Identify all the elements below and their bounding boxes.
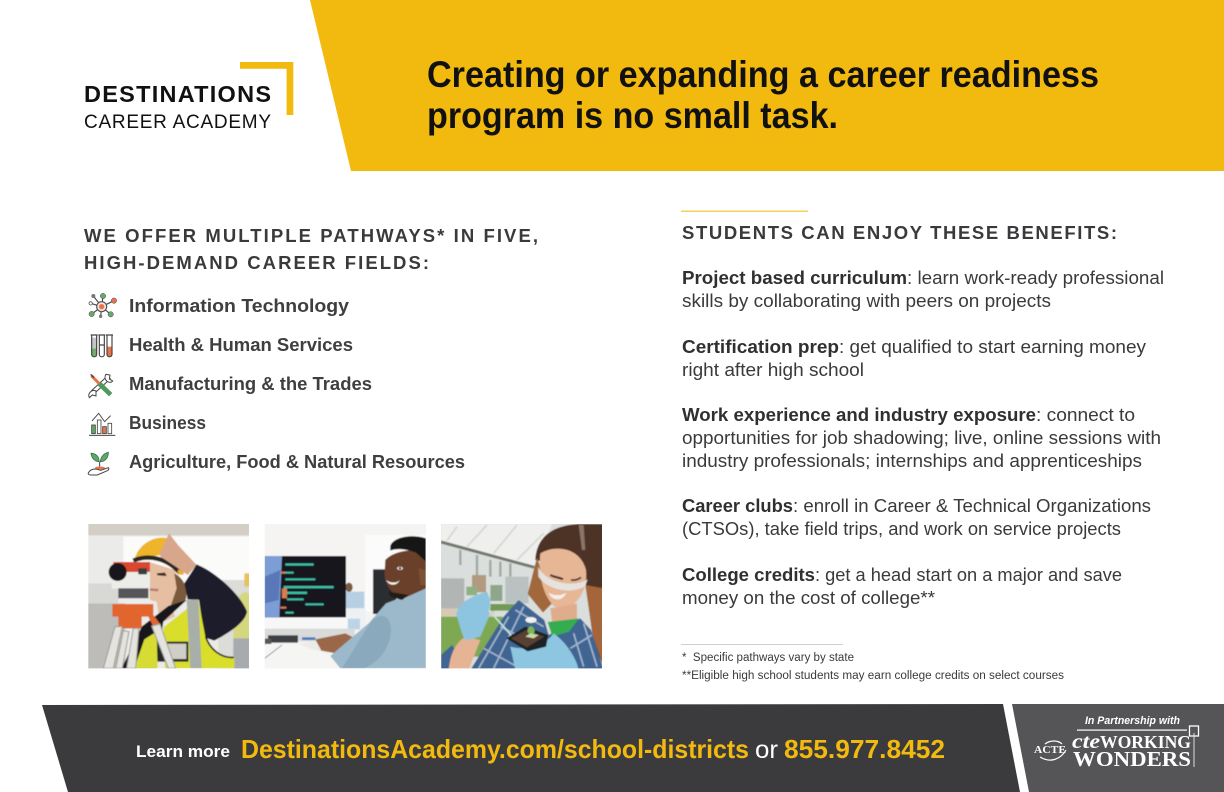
benefit: work experience: opportunities for job shadowing; live, online sessions with <box>682 427 1161 448</box>
footer call-to-action bar: DestinationsAcademy.com/school-districts <box>241 734 749 764</box>
partner panel: WONDERS <box>1073 747 1191 771</box>
logo: ACTE <box>1034 741 1066 760</box>
footer call-to-action bar <box>42 704 1020 792</box>
benefit: college credits: College credits <box>682 564 815 585</box>
benefit: career clubs: Career clubs <box>682 495 793 516</box>
footnotes <box>681 644 1064 682</box>
footnotes: **Eligible high school students may earn college credits on select courses <box>682 670 1064 682</box>
icon: small emblem <box>1190 726 1198 736</box>
benefit: college credits: money on the cost of college** <box>682 587 935 608</box>
headline: Creating or expanding a career readiness <box>427 54 1099 95</box>
icon: seedling in hand <box>88 452 109 475</box>
photo: programmer at computer <box>262 520 429 670</box>
label: Business: Business <box>129 412 206 433</box>
benefit: career clubs: : enroll in Career & Technical Organizations <box>793 495 1151 516</box>
left heading: WE OFFER MULTIPLE PATHWAYS* IN FIVE, <box>84 225 538 246</box>
benefits heading: STUDENTS CAN ENJOY THESE BENEFITS: <box>682 222 1117 243</box>
label: Information Technology: Information Technology <box>129 295 350 316</box>
benefit: career clubs: (CTSOs), take field trips, and work on service projects <box>682 518 1121 539</box>
benefit: work experience <box>682 404 1161 471</box>
headline <box>427 54 1099 136</box>
label: Agriculture, Food & Natural Resources: Agriculture, Food & Natural Resources <box>129 451 465 472</box>
footer call-to-action bar: or <box>755 736 778 764</box>
partner panel: cte <box>1072 731 1100 753</box>
photo: student with seedling <box>437 520 604 670</box>
left heading <box>84 225 538 273</box>
benefit: work experience: : connect to <box>1036 404 1135 425</box>
career fields list <box>88 293 465 475</box>
partner panel: WORKING <box>1100 732 1191 752</box>
benefit: work experience: Work experience and industry exposure <box>682 404 1036 425</box>
benefit: college credits: : get a head start on a major and save <box>815 564 1122 585</box>
benefit: certification prep <box>682 336 1147 380</box>
right accent rule <box>681 210 808 212</box>
footer call-to-action bar: 855.977.8452 <box>784 734 945 764</box>
icon: wrench and screwdriver <box>89 374 113 398</box>
benefit: certification prep: : get qualified to start earning money <box>839 336 1147 357</box>
benefit: college credits <box>682 564 1122 608</box>
logo: Destinations Career Academy: DESTINATIONS <box>84 81 271 107</box>
logo: Destinations Career Academy <box>84 62 293 133</box>
benefit: project based curriculum: : learn work-ready professional <box>907 267 1164 288</box>
benefit: project based curriculum: skills by collaborating with peers on projects <box>682 290 1051 311</box>
icon: test tubes <box>91 335 113 357</box>
benefit: work experience: industry professionals; internships and apprenticeships <box>682 450 1142 471</box>
icon: information technology network <box>89 293 117 318</box>
partner panel: In Partnership with <box>1085 715 1180 727</box>
benefit: certification prep: right after high school <box>682 359 864 380</box>
benefit: project based curriculum: Project based curriculum <box>682 267 907 288</box>
benefit: certification prep: Certification prep <box>682 336 839 357</box>
logo: Destinations Career Academy: CAREER ACADEMY <box>84 112 271 133</box>
logo: ACTE: ACTE <box>1034 744 1066 756</box>
benefit: career clubs <box>682 495 1151 539</box>
label: Manufacturing & the Trades: Manufacturing & the Trades <box>129 373 372 394</box>
icon: business chart <box>89 413 115 435</box>
left heading: HIGH-DEMAND CAREER FIELDS: <box>84 252 429 273</box>
footnotes: * Specific pathways vary by state <box>682 652 854 664</box>
photo: surveyor with hard hat <box>85 520 252 670</box>
benefit: project based curriculum <box>682 267 1164 311</box>
headline: program is no small task. <box>427 95 838 136</box>
header banner <box>310 0 1224 171</box>
label: Health & Human Services: Health & Human Services <box>129 334 353 355</box>
partner panel <box>1012 704 1224 792</box>
footer call-to-action bar: Learn more <box>136 742 230 761</box>
